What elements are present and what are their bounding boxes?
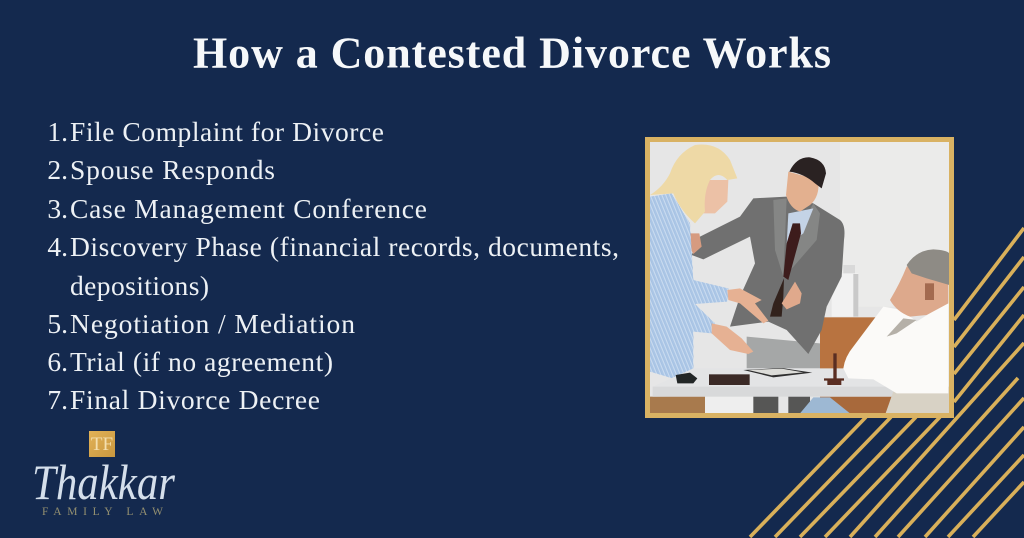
title: How a Contested Divorce Works xyxy=(193,28,831,78)
lawyer jacket xyxy=(692,197,844,354)
step 7: 7. xyxy=(47,384,68,415)
step 4: depositions) xyxy=(70,270,209,301)
step 2: 2. xyxy=(47,154,68,185)
lawyer head xyxy=(786,172,819,212)
logo monogram tile: TF xyxy=(91,434,113,455)
step 1: File Complaint for Divorce xyxy=(70,116,384,147)
table xyxy=(652,368,844,397)
woman's hands xyxy=(727,288,768,323)
photo frame xyxy=(645,137,954,418)
lawyer hand xyxy=(782,282,802,309)
shelf xyxy=(832,280,853,316)
logo monogram tile xyxy=(89,431,115,457)
step 5: Negotiation / Mediation xyxy=(70,308,355,339)
seated man's head and hand xyxy=(890,266,948,317)
step 4 xyxy=(47,231,619,301)
seated man's jeans xyxy=(800,397,850,413)
decorative gold diagonal stripes xyxy=(750,228,1024,537)
seated man's shirt xyxy=(843,302,948,393)
step 2: Spouse Responds xyxy=(70,154,275,185)
logo subtitle: FAMILY LAW xyxy=(42,506,163,518)
seated man's vest xyxy=(885,387,950,415)
cabinet xyxy=(820,317,877,371)
step 3: 3. xyxy=(47,193,68,224)
step 1: 1. xyxy=(47,116,68,147)
step 4: 4. xyxy=(47,231,68,262)
scales xyxy=(824,353,844,385)
step 3: Case Management Conference xyxy=(70,193,427,224)
box on table xyxy=(709,374,750,385)
logo script wordmark: Thakkar xyxy=(32,454,175,510)
step 5: 5. xyxy=(47,308,68,339)
woman's shirt xyxy=(650,193,728,382)
step 6: 6. xyxy=(47,346,68,377)
photo: couple arguing with lawyer at a desk xyxy=(645,137,954,418)
logo: Thakkar Family Law xyxy=(32,431,175,518)
numbered list of divorce steps xyxy=(47,116,619,415)
step 6: Trial (if no agreement) xyxy=(70,346,333,377)
woman's face and hair xyxy=(704,180,728,214)
step 7: Final Divorce Decree xyxy=(70,384,320,415)
clipboard xyxy=(743,368,812,377)
stapler xyxy=(676,373,697,383)
lawyer trousers xyxy=(747,337,820,368)
step 4: Discovery Phase (financial records, documents, xyxy=(70,231,619,262)
